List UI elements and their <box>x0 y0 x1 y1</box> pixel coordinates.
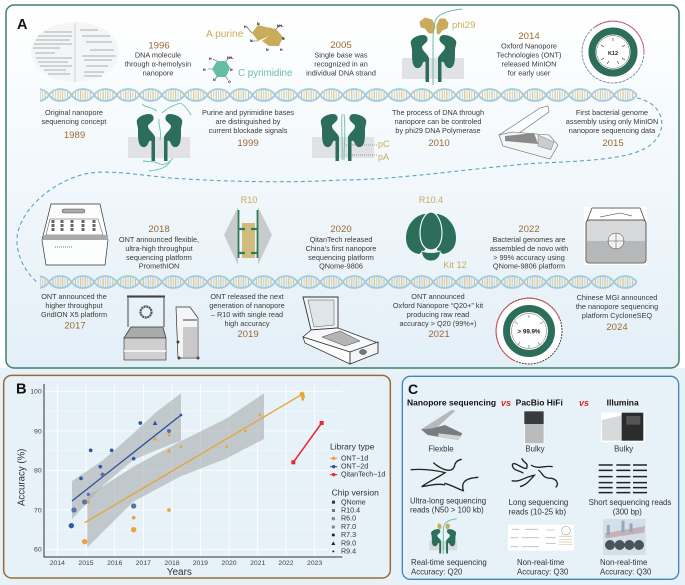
nanopore device <box>421 410 462 454</box>
event 2019: ONT released the next <box>210 292 284 301</box>
pyrimidine label: C pyrimidine <box>238 68 293 79</box>
event 1999: Purine and pyrimidine bases <box>202 108 294 117</box>
x axis title: Years <box>167 567 192 578</box>
x axis labels: 2021 <box>250 560 265 567</box>
icon: K12 genome circle: K12 <box>608 51 618 57</box>
icon: pyrimidine molecule: H <box>203 68 206 72</box>
panel A heading: A <box>17 17 28 33</box>
panel C: platform comparison <box>402 376 679 579</box>
nanopore real-time icon <box>429 519 457 554</box>
x axis labels: 2023 <box>307 560 322 567</box>
y axis labels <box>30 389 42 554</box>
ultra-long text: Ultra-long sequencing <box>410 496 486 505</box>
event 2018 <box>119 224 199 270</box>
long read text: Long sequencing <box>509 498 568 507</box>
event 2020: QNome-9806 <box>319 262 363 270</box>
icon: purine molecule: N <box>250 39 253 43</box>
panel B: accuracy chart <box>4 375 390 578</box>
event 2005: Single base was <box>314 50 368 60</box>
event 2015: assembly using only MinION <box>566 117 658 126</box>
event 2017: 2017 <box>64 320 86 332</box>
event 2024: the nanopore sequencing <box>576 302 658 311</box>
Illumina device: Bulky <box>614 445 633 454</box>
event 2022: 2022 <box>518 224 540 235</box>
event 2018: ONT announced flexible, <box>119 235 199 244</box>
x axis labels: 2022 <box>278 560 294 567</box>
panel A: nanopore timeline <box>6 5 679 368</box>
PacBio text: Accuracy: Q30 <box>517 567 569 576</box>
y axis labels: 60 <box>34 547 42 554</box>
icon: GridION device <box>124 296 200 360</box>
icon: PromethION device <box>42 204 108 265</box>
column headings: Illumina <box>607 398 639 408</box>
column headings: vs <box>501 398 511 408</box>
icon: pyrimidine molecule: N <box>213 78 216 82</box>
event 2014: for early user <box>508 68 551 78</box>
event 2017: GridION X5 platform <box>41 310 107 319</box>
icon: pyrimidine molecule: NH₂ <box>227 56 234 60</box>
event 1996: 1996 <box>148 40 170 52</box>
panel C heading: C <box>408 381 418 397</box>
axes <box>44 384 342 557</box>
event 2014: 2014 <box>518 31 540 42</box>
x axis labels <box>50 560 322 567</box>
icon: purine molecule: N <box>266 48 269 52</box>
icon: QNome device <box>303 297 378 364</box>
x axis labels: 2019 <box>193 560 208 567</box>
lower background <box>0 368 685 585</box>
x axis labels: 2020 <box>221 560 237 567</box>
legend: chip version: Chip version <box>332 487 379 497</box>
event 1999 <box>202 108 294 149</box>
event 2005: individual DNA strand <box>306 68 376 78</box>
event 2014 <box>497 31 561 78</box>
icon: pyrimidine molecule: O <box>228 80 231 84</box>
icon: pore with current levels <box>312 114 390 162</box>
event 2020: 2020 <box>330 224 352 235</box>
nanopore device: Flexble <box>428 445 454 454</box>
icon: purine molecule: N <box>257 22 260 26</box>
event 2019 <box>209 292 285 340</box>
Illumina text <box>600 558 652 576</box>
event 2018: PromethION <box>139 262 179 270</box>
event 2005 <box>306 40 376 78</box>
ONT-2d points <box>69 414 182 528</box>
event 2010: by phi29 DNA Polymerase <box>395 126 481 135</box>
icon: purine molecule: N <box>282 37 285 41</box>
DNA helix row 2 <box>40 275 637 289</box>
icon: pyrimidine molecule <box>203 56 234 84</box>
event 2020 <box>306 224 376 270</box>
icon: pore with DNA fragments <box>128 103 191 171</box>
R10.4 label: R10.4 <box>419 195 443 205</box>
column headings: PacBio HiFi <box>516 398 563 408</box>
event 2020: China's first nanopore <box>306 244 376 253</box>
short read text <box>589 498 671 516</box>
Illumina text: Non-real-time <box>600 558 647 567</box>
plot background grid <box>44 384 342 557</box>
x axis labels: 2016 <box>107 560 122 567</box>
x axis labels: 2018 <box>164 560 180 567</box>
short read text: Short sequencing reads <box>589 498 671 507</box>
PacBio text: Non-real-time <box>517 558 564 567</box>
PacBio device <box>524 411 545 454</box>
event 2024: 2024 <box>606 322 628 333</box>
icon: R10.4 pore <box>406 212 456 261</box>
column headings <box>407 398 639 408</box>
legend: chip version: R7.3 <box>341 531 356 539</box>
nanopore real-time text <box>411 558 487 576</box>
long reads squiggles <box>411 459 478 491</box>
event 2015: 2015 <box>602 138 624 149</box>
event 2018: 2018 <box>148 224 170 235</box>
long read text <box>509 498 568 516</box>
event 1989 <box>42 108 106 141</box>
event 2014: Oxford Nanopore <box>501 42 557 50</box>
event 2022: QNome-9806 platform <box>493 262 565 270</box>
event 2010: 2010 <box>428 138 450 149</box>
event 2021: Oxford Nanopore “Q20+” kit <box>393 301 483 310</box>
icon: purine molecule: H <box>244 25 247 29</box>
x axis labels: 2015 <box>78 560 94 567</box>
event 2021: accuracy > Q20 (99%+) <box>399 319 477 328</box>
trend lines <box>72 394 303 523</box>
legend: library type: QitanTech−1d <box>341 471 385 479</box>
Illumina flow thumbnail <box>603 519 646 555</box>
icon: purine molecule: NH₂ <box>277 24 284 28</box>
purine label: A purine <box>206 29 244 40</box>
legend: library type: ONT−1d <box>341 455 368 463</box>
ultra-long text: reads (N50 > 100 kb) <box>410 506 484 515</box>
y axis labels: 80 <box>34 468 42 475</box>
column headings: vs <box>579 398 589 408</box>
event 2015: First bacterial genome <box>576 108 648 117</box>
y axis title: Accuracy (%) <box>16 449 27 506</box>
long read text: reads (10-25 kb) <box>509 507 566 516</box>
event 1996: DNA molecule <box>135 50 181 60</box>
event 2022: assembled de novo with <box>490 244 568 253</box>
confidence bands <box>72 393 264 547</box>
event 2021 <box>393 292 483 340</box>
event 2018: ultra-high throughput <box>125 244 193 253</box>
event 2019: 2019 <box>237 329 259 340</box>
icon: pore with current levels: pC <box>378 139 390 149</box>
event 2017: higher throughput <box>45 301 103 310</box>
y axis labels: 100 <box>30 389 42 396</box>
event 2010: The process of DNA through <box>392 108 484 117</box>
phi29 label: phi29 <box>452 20 475 31</box>
event 2015: nanopore sequencing data <box>569 126 656 135</box>
event 2024 <box>576 293 658 333</box>
icon: 99.9% accuracy circle <box>496 298 562 364</box>
event 2019: high accuracy <box>224 319 270 328</box>
dashed connector <box>17 98 662 283</box>
icon: pyrimidine molecule: N <box>230 68 233 72</box>
event 1999: 1999 <box>237 138 259 149</box>
event 1996 <box>125 40 191 78</box>
event 2014: Technologies (ONT) <box>497 50 561 60</box>
event 2021: 2021 <box>428 329 450 340</box>
nanopore real-time text: Real-time sequencing <box>411 558 487 567</box>
icon: 99.9% accuracy circle: > 99.9% <box>518 328 541 336</box>
event 2017: ONT announced the <box>41 292 107 301</box>
event 2018: sequencing platform <box>126 253 192 262</box>
event 2022 <box>490 224 568 270</box>
event 2005: recognized in an <box>314 60 368 68</box>
nanopore real-time text: Accuracy: Q20 <box>411 567 463 576</box>
event 2022: > 99% accuracy using <box>493 253 565 262</box>
event 2017 <box>41 292 107 332</box>
event 1989: Original nanopore <box>45 108 103 117</box>
Illumina device <box>601 412 645 454</box>
event 1989: 1989 <box>64 130 85 141</box>
event 1999: are distinguished by <box>216 117 281 126</box>
icon: MinION device <box>499 106 558 159</box>
R10 label: R10 <box>241 195 257 205</box>
short reads <box>599 465 647 493</box>
y axis labels: 90 <box>34 428 42 435</box>
legend: chip version: R10.4 <box>341 507 360 515</box>
legend: chip version: R6.0 <box>341 515 356 523</box>
icon: pyrimidine molecule: H <box>209 57 212 61</box>
panel B heading: B <box>16 381 27 397</box>
QitanTech trend <box>291 421 324 464</box>
event 2024: Chinese MGI announced <box>577 293 657 302</box>
legend: library type: Library type <box>330 442 375 452</box>
event 2019: generation of nanopore <box>209 301 285 310</box>
event 1996: nanopore <box>143 68 173 78</box>
y axis labels: 70 <box>34 507 42 514</box>
DNA helix row 1 <box>40 88 637 102</box>
event 2021: ONT announced <box>411 292 465 301</box>
ultra-long text <box>410 496 486 515</box>
event 2010 <box>392 108 484 149</box>
Kit 12 label: Kit 12 <box>443 260 467 270</box>
x axis labels: 2017 <box>136 560 151 567</box>
event 2010: nanopore can be controled <box>395 117 481 126</box>
event 2015 <box>566 108 658 149</box>
PacBio text <box>517 558 569 576</box>
legend: library type: ONT−2d <box>341 463 368 471</box>
event 2014: released MinION <box>502 60 556 68</box>
icon: pore with current levels: pA <box>378 152 389 162</box>
legend: chip version <box>331 487 379 555</box>
legend: chip version: R9.0 <box>341 539 356 547</box>
long reads <box>512 458 557 487</box>
icon: K12 genome circle <box>582 21 644 83</box>
legend: chip version: R9.4 <box>341 547 356 555</box>
legend: chip version: QNome <box>341 498 366 506</box>
PacBio workflow thumbnail <box>508 525 574 551</box>
icon: phi29 pore <box>402 9 464 85</box>
event 2022: Bacterial genomes are <box>492 235 566 244</box>
icon: handwritten notebook <box>31 22 119 82</box>
legend: library type <box>330 442 385 479</box>
event 2021: producing raw read <box>407 310 469 319</box>
event 1989: sequencing concept <box>42 117 106 126</box>
event 2019: – R10 with single read <box>211 310 283 319</box>
event 1999: current blockade signals <box>209 126 288 135</box>
ONT-1d points <box>82 392 305 544</box>
legend: chip version: R7.0 <box>341 523 356 531</box>
column headings: Nanopore sequencing <box>407 398 496 408</box>
Illumina text: Accuracy: Q30 <box>600 567 652 576</box>
icon: CycloneSEQ device <box>584 207 647 265</box>
event 2005: 2005 <box>330 40 352 51</box>
event 2024: platform CycloneSEQ <box>582 311 652 320</box>
event 2020: sequencing platform <box>308 253 374 262</box>
x axis labels: 2014 <box>50 560 65 567</box>
PacBio device: Bulky <box>525 445 545 454</box>
icon: purine molecule <box>244 22 285 52</box>
event 1996: through α-hemolysin <box>125 60 191 68</box>
short read text: (300 bp) <box>613 507 642 516</box>
icon: purine molecule: H <box>280 48 283 52</box>
icon: R10 pore <box>224 207 272 265</box>
event 2020: QitanTech released <box>310 235 372 244</box>
